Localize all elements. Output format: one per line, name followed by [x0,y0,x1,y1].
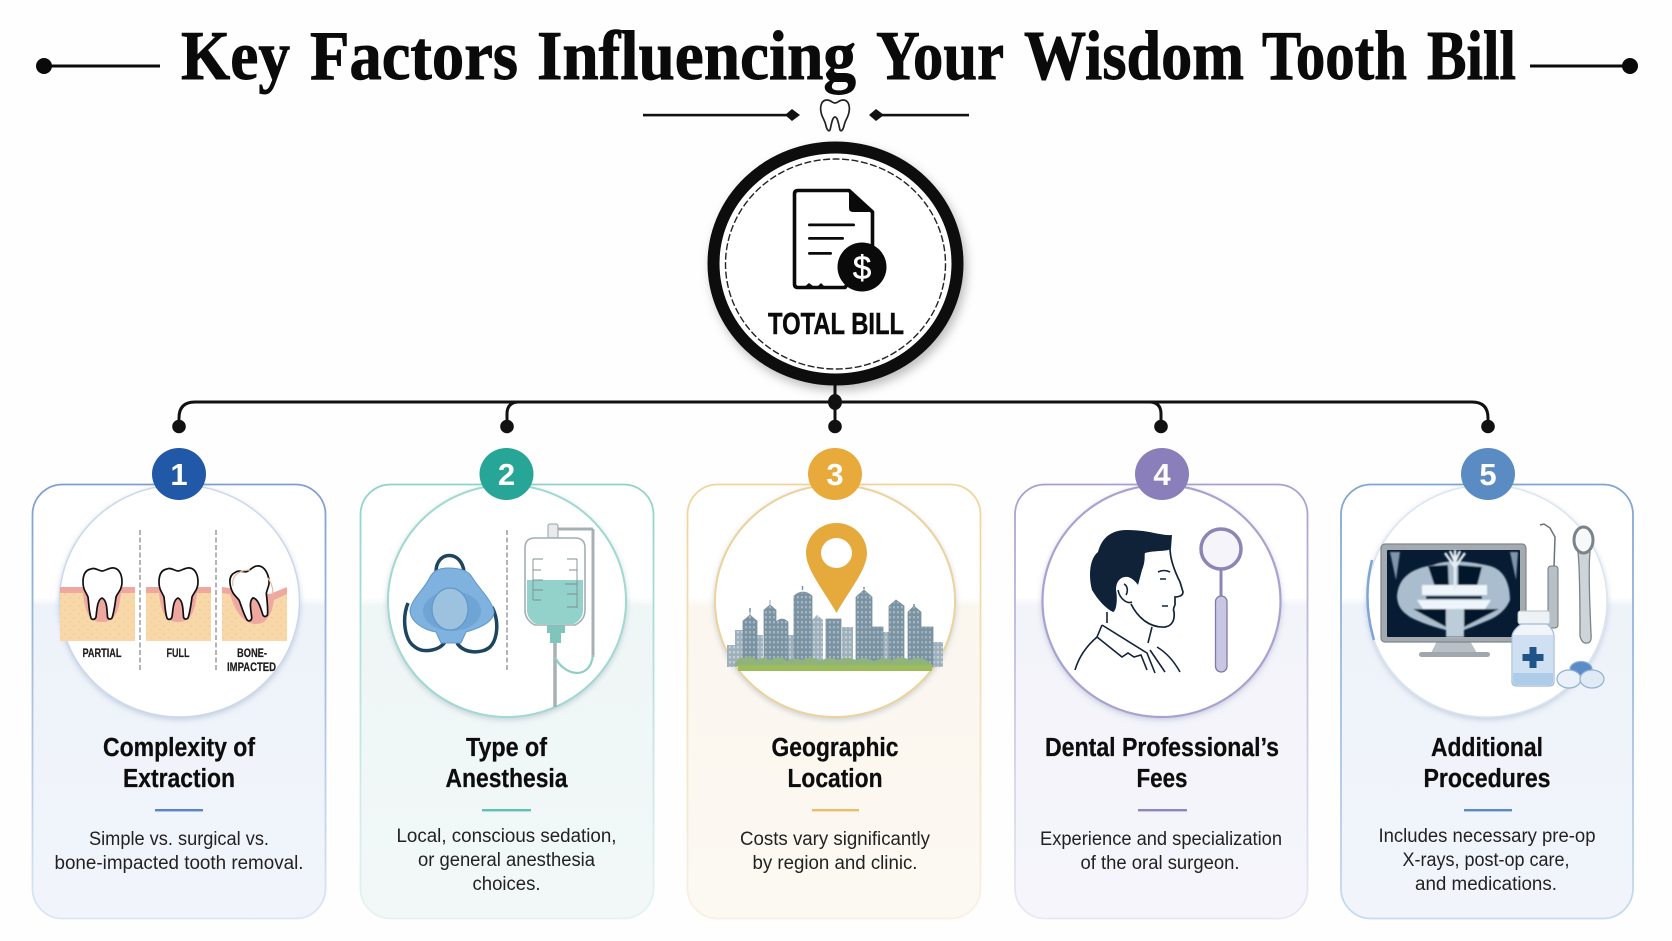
panel: additional procedures [1341,448,1633,918]
icon: tooth [821,100,849,131]
label: partial: PARTIAL [82,648,122,660]
panel: complexity of extraction: IMPACTED [227,662,276,674]
number badge 2 [480,448,534,500]
title divider with tooth icon [643,100,969,131]
description [1040,829,1282,874]
icon: location pin [806,523,867,613]
accent rule [1464,809,1512,811]
heading: Additional [1431,734,1543,762]
illustration: pills [1557,662,1604,688]
label: bone-impacted: BONE- [237,648,267,660]
accent rule [155,809,203,811]
number badge 1 [152,448,206,500]
title text: Factors [310,18,518,95]
number badge 5 [1461,448,1515,500]
description: and medications. [1415,874,1557,895]
illustration: dentist profile [1075,530,1183,673]
number badge 2: 2 [498,457,515,492]
title [36,18,1638,95]
illustration: three impaction types [60,564,287,641]
description [396,826,616,895]
title right ornament [1530,58,1638,74]
heading: Fees [1136,765,1188,793]
heading [772,734,898,793]
card background [1341,484,1633,918]
description: X-rays, post-op care, [1402,850,1570,871]
card background [688,484,980,918]
heading: Complexity of [103,734,255,762]
heading: Anesthesia [446,765,568,793]
heading [1424,734,1550,793]
tooth full [159,568,198,619]
accent rule [812,809,859,811]
heading: Type of [466,734,547,762]
illustration: anesthesia mask [405,556,497,652]
description: by region and clinic. [752,853,918,874]
title text: Influencing [537,18,856,95]
heading: Geographic [772,734,898,762]
number badge 1: 1 [170,457,188,492]
tooth bone-impacted [227,564,278,623]
illustration circle [715,485,955,717]
total bill badge [714,148,958,380]
description: Simple vs. surgical vs. [89,829,269,850]
illustration: dental mirror [1201,529,1241,672]
heading: Dental Professional’s [1045,734,1279,762]
heading: Procedures [1424,765,1550,793]
icon: invoice with dollar: $ [853,249,871,286]
badge ring [714,148,958,380]
tooth partial [83,568,122,619]
description: Experience and specialization [1040,829,1282,850]
illustration circle [60,485,300,717]
accent rule [482,809,531,811]
heading [103,734,255,793]
title text: Your [876,18,1004,95]
title text: Wisdom [1024,18,1244,95]
title text: Tooth [1262,18,1407,95]
card background [360,484,654,918]
illustration: medicine bottle [1512,611,1554,686]
number badge 5: 5 [1479,457,1497,492]
panel: dental professional's fees [1015,448,1308,918]
heading [1045,734,1279,793]
illustration: x-ray monitor [1381,544,1526,657]
connector lines [172,385,1495,433]
description: of the oral surgeon. [1080,853,1240,874]
label: full: FULL [166,648,190,660]
icon: invoice with dollar [794,190,886,292]
description: Costs vary significantly [740,829,930,850]
description [1378,826,1596,895]
illustration: iv bag [525,524,593,707]
description [740,829,930,874]
number badge 4: 4 [1153,457,1171,492]
illustration circle [388,485,626,717]
arc accent on circle [1367,560,1374,640]
illustration circle [1042,485,1280,717]
dashed inner ring [726,159,946,369]
card background [1015,484,1308,918]
number badge 3: 3 [826,457,844,492]
panel: complexity of extraction [32,448,326,918]
heading: Location [788,765,882,793]
description: or general anesthesia [418,850,595,871]
illustration: forceps [1574,527,1593,643]
number badge 3 [808,448,862,500]
description [54,829,304,874]
description: Includes necessary pre-op [1378,826,1596,847]
title text: Bill [1427,18,1516,95]
panel: type of anesthesia [360,448,654,918]
heading: Extraction [123,765,235,793]
description: bone-impacted tooth removal. [54,853,304,874]
card background [32,484,326,918]
number badge 4 [1135,448,1189,500]
panel: geographic location [688,448,980,918]
illustration circle [1367,485,1607,717]
title left ornament [36,58,160,74]
illustration: city skyline [727,586,943,671]
heading [446,734,568,793]
title text [181,18,1516,95]
title text: Key [181,18,290,95]
illustration: dental probe [1540,524,1558,628]
accent rule [1138,809,1187,811]
description: choices. [472,874,540,895]
badge label: TOTAL BILL [768,306,904,341]
description: Local, conscious sedation, [396,826,616,847]
